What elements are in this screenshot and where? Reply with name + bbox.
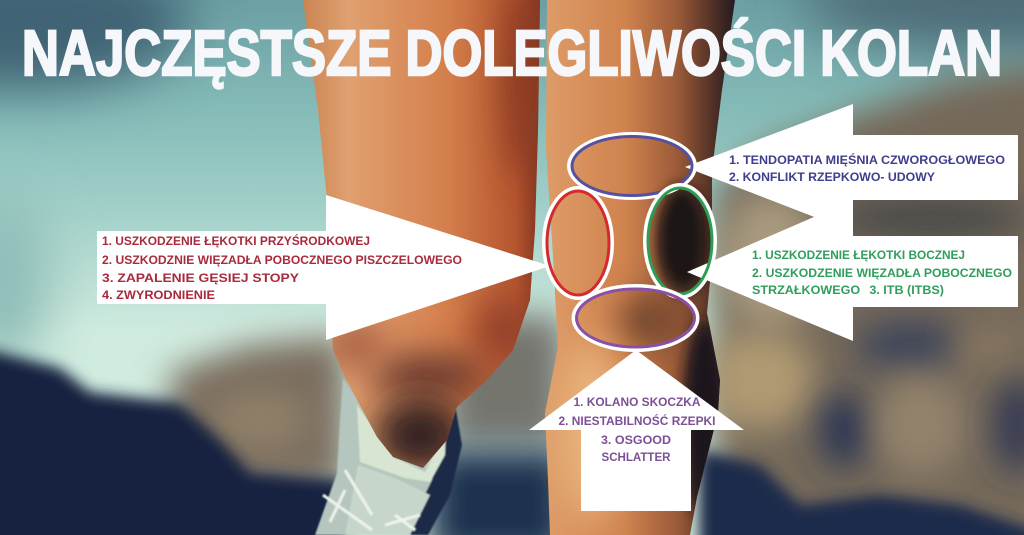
ellipse: left, red [544,188,612,298]
text: left list: 1. USZKODZENIE ŁĘKOTKI PRZYŚRODKOWEJ [102,233,370,248]
arrow: top right, white with text panel [685,104,1018,232]
text: left list: 4. ZWYRODNIENIE [102,288,215,302]
text: bottom list: 3. OSGOOD [601,433,671,447]
text: right list: 1. USZKODZENIE ŁĘKOTKI BOCZNEJ [752,248,965,262]
text: top right list [729,152,1005,184]
text: right list: STRZAŁKOWEGO 3. ITB (ITBS) [752,283,944,297]
shoe [315,378,462,535]
arrow: left, white with red text [97,195,550,340]
ellipse: right, green [645,185,715,297]
ellipse: bottom, purple [574,286,698,350]
text: bottom list: 2. NIESTABILNOŚĆ RZEPKI [558,413,716,428]
arrow: right, white with green text [687,200,1018,341]
text: left list: 3. ZAPALENIE GĘSIEJ STOPY [102,271,299,285]
text: bottom list: 1. KOLANO SKOCZKA [574,395,701,409]
text: right list [752,248,1012,297]
arrow: bottom, white with purple text [529,350,744,511]
text: bottom list [558,395,716,464]
ellipse: top, blue [569,134,695,198]
text: top right list: 2. KONFLIKT RZEPKOWO- UDOWY [729,170,935,184]
text: bottom list: SCHLATTER [602,450,671,464]
left leg [300,0,547,480]
text: left list: 2. USZKODZNIE WIĘZADŁA POBOCZNEGO PISZCZELOWEGO [102,253,462,267]
text: left list [102,233,462,302]
text: top right list: 1. TENDOPATIA MIĘŚNIA CZWOROGŁOWEGO [729,152,1005,167]
right leg [545,0,735,535]
text: right list: 2. USZKODZENIE WIĘZADŁA POBOCZNEGO [752,266,1012,280]
